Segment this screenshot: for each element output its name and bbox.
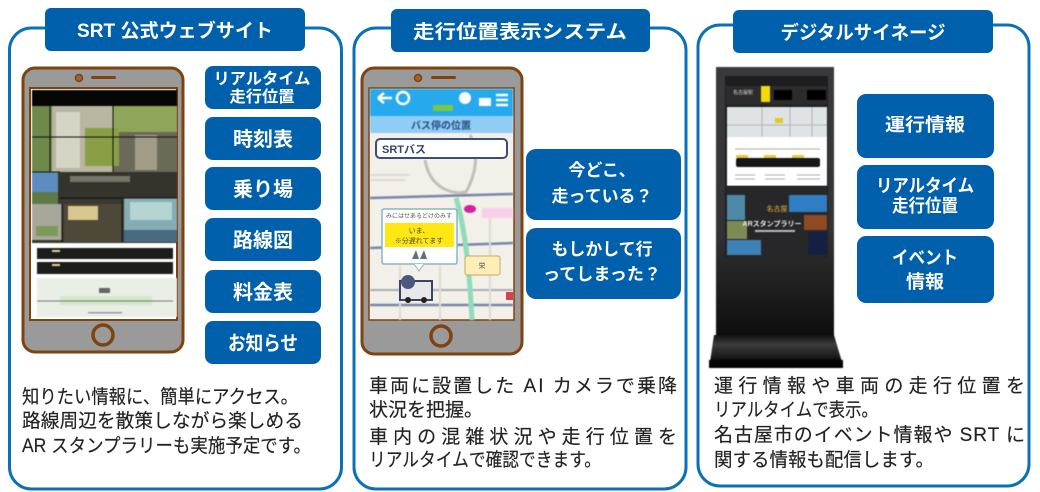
speech button: has it already gone: もしかして行	[552, 240, 652, 259]
panel: SRT official website	[10, 8, 342, 489]
button: realtime position: 走行位置	[892, 196, 958, 216]
text block: website description: 知りたい情報に、簡単にアクセス。	[22, 386, 298, 408]
button: service info	[857, 94, 994, 158]
panel: digital signage	[698, 10, 1029, 486]
signage event poster	[726, 186, 828, 257]
heading: SRT official website: SRT 公式ウェブサイト	[77, 19, 273, 42]
speech button: has it already gone: ってしまった？	[543, 265, 661, 284]
heading: location display system	[391, 9, 650, 52]
button: timetable: 時刻表	[233, 128, 293, 151]
signage event poster: 名古屋	[766, 204, 788, 213]
heading: digital signage: デジタルサイネージ	[780, 21, 946, 44]
text block: system description: リアルタイムで確認できます。	[369, 449, 601, 471]
button: fares: 料金表	[233, 281, 293, 304]
button: route map: 路線図	[233, 229, 293, 252]
text block: signage description: リアルタイムで表示。	[714, 399, 878, 421]
speech button: has it already gone	[526, 228, 681, 299]
icon: smartphone showing bus map: ※分遅れてます	[395, 236, 443, 245]
button: realtime position: 走行位置	[230, 88, 294, 106]
button: realtime position: リアルタイム	[876, 176, 974, 196]
button: boarding point: 乗り場	[233, 178, 293, 201]
speech button: where is it now	[526, 149, 681, 220]
heading: digital signage	[733, 10, 993, 53]
button: route map	[205, 218, 321, 261]
icon: smartphone showing bus map: みにはせあるどけのみす	[386, 212, 452, 220]
panel: location display system	[354, 9, 686, 489]
icon: smartphone showing website	[23, 68, 183, 352]
icon: signage kiosk: 名古屋駅	[733, 89, 753, 96]
text block: system description: 車両に設置した AI カメラで乗降	[369, 375, 677, 397]
icon: smartphone showing bus map	[362, 68, 522, 354]
text block: website description	[22, 386, 311, 457]
button: event info	[857, 236, 994, 303]
nav buttons	[205, 66, 321, 364]
text block: signage description	[714, 375, 1025, 471]
button: realtime position	[205, 66, 321, 109]
button: realtime position	[857, 165, 994, 229]
speech button: where is it now: 走っている？	[552, 187, 652, 206]
text block: system description: 車内の混雑状況や走行位置を	[369, 426, 677, 448]
icon: smartphone showing bus map: 栄	[478, 261, 486, 270]
text block: signage description: 運行情報や車両の走行位置を	[714, 375, 1025, 397]
speech button: where is it now: 今どこ、	[568, 160, 636, 180]
button: service info: 運行情報	[885, 115, 965, 135]
text block: signage description: 関する情報も配信します。	[714, 449, 934, 471]
button: timetable	[205, 117, 321, 160]
text block: system description	[369, 375, 677, 471]
icon: smartphone showing bus map: バス停の位置	[411, 119, 471, 132]
button: realtime position: リアルタイム	[214, 70, 310, 88]
text block: website description: 路線周辺を散策しながら楽しめる	[22, 410, 303, 432]
text block: system description: 状況を把握。	[369, 399, 483, 421]
text block: signage description: 名古屋市のイベント情報や SRT に	[714, 424, 1025, 446]
button: event info: イベント	[892, 248, 958, 268]
heading: location display system: 走行位置表示システム	[413, 21, 627, 43]
button: news	[205, 321, 321, 364]
icon: smartphone showing bus map: SRTバス	[382, 143, 426, 156]
button: news: お知らせ	[228, 332, 298, 355]
heading: SRT official website	[45, 8, 305, 51]
text block: website description: AR スタンプラリーも実施予定です。	[22, 435, 311, 457]
signage event poster: ARスタンプラリー	[743, 219, 801, 228]
icon: signage kiosk	[709, 67, 843, 368]
button: event info: 情報	[906, 272, 944, 292]
icon: smartphone showing bus map: いま、	[409, 227, 429, 235]
button: boarding point	[205, 167, 321, 210]
button: fares	[205, 270, 321, 313]
